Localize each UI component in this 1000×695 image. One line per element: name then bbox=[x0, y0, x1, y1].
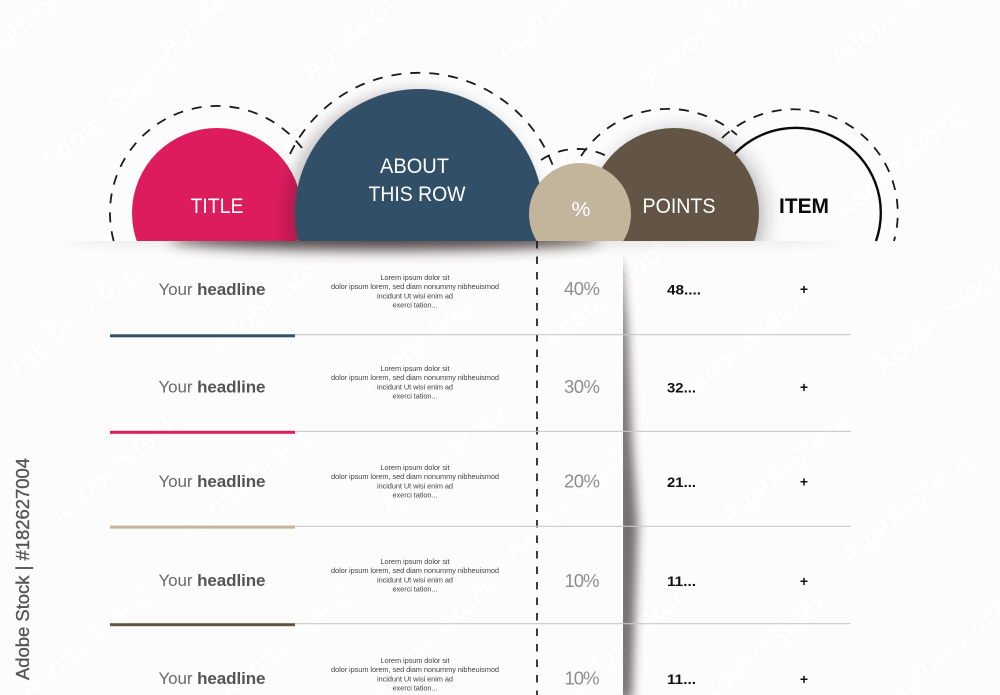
watermarks: Adobe Stock bbox=[174, 420, 315, 546]
label: item: ITEM bbox=[779, 195, 829, 218]
dashed arc: percent bbox=[541, 149, 612, 160]
watermarks: Adobe Stock bbox=[829, 100, 970, 226]
row 3 bbox=[158, 463, 808, 500]
watermarks: Adobe Stock bbox=[669, 285, 810, 411]
semicircle: percent bbox=[529, 163, 631, 241]
description 2: Lorem ipsum dolor sit bbox=[380, 364, 450, 373]
description 2: incidunt Ut wisi enim ad bbox=[377, 382, 453, 391]
description 5 bbox=[331, 656, 499, 693]
points 5: 11... bbox=[667, 672, 696, 687]
description 5: incidunt Ut wisi enim ad bbox=[377, 674, 453, 683]
row 4 bbox=[158, 557, 808, 594]
points 3: 21... bbox=[667, 475, 696, 490]
row dividers bbox=[110, 334, 851, 626]
row 1 bbox=[158, 273, 808, 310]
description 5: Lorem ipsum dolor sit bbox=[380, 656, 450, 665]
semicircle: about this row bbox=[280, 83, 542, 241]
description 3: incidunt Ut wisi enim ad bbox=[377, 481, 453, 490]
description 3: Lorem ipsum dolor sit bbox=[380, 463, 450, 472]
description 2 bbox=[331, 364, 499, 401]
percent 5: 10% bbox=[564, 668, 600, 688]
vertical dashed line bbox=[536, 241, 538, 695]
watermarks: Adobe Stock bbox=[2, 255, 143, 381]
description 1: exerci tation... bbox=[392, 301, 438, 310]
description 3: exerci tation... bbox=[392, 491, 438, 500]
points 4: 11... bbox=[667, 574, 696, 589]
percent 1: 40% bbox=[564, 278, 600, 299]
headline 5: Your headline bbox=[158, 669, 266, 688]
watermarks: Adobe Stock bbox=[564, 570, 705, 695]
row 5 bbox=[158, 656, 808, 693]
watermarks: Adobe Stock bbox=[536, 230, 677, 356]
semicircle: title bbox=[132, 128, 298, 241]
description 3 bbox=[331, 463, 499, 500]
description 5: dolor ipsum lorem, sed diam nonummy nibheuismod bbox=[331, 665, 499, 674]
description 4: dolor ipsum lorem, sed diam nonummy nibheuismod bbox=[331, 566, 499, 575]
description 3: dolor ipsum lorem, sed diam nonummy nibheuismod bbox=[331, 472, 499, 481]
description 1: Lorem ipsum dolor sit bbox=[380, 273, 450, 282]
description 1: incidunt Ut wisi enim ad bbox=[377, 291, 453, 300]
watermarks: Adobe Stock bbox=[374, 395, 515, 521]
description 2: exerci tation... bbox=[392, 392, 438, 401]
description 1 bbox=[331, 273, 499, 310]
shadow under header bbox=[89, 241, 811, 262]
description 4: exerci tation... bbox=[392, 585, 438, 594]
percent 2: 30% bbox=[564, 376, 600, 397]
label: about this row bbox=[368, 158, 466, 201]
percent 4: 10% bbox=[564, 570, 600, 591]
stock credit: Adobe Stock | #182627004 bbox=[13, 458, 33, 680]
watermarks: Adobe Stock bbox=[204, 235, 345, 361]
semicircle: points bbox=[598, 120, 776, 241]
watermarks: Adobe Stock bbox=[364, 570, 505, 695]
label: points: POINTS bbox=[642, 195, 716, 218]
row 2 bbox=[158, 364, 808, 401]
panel: dashed and outline arcs bbox=[110, 73, 898, 241]
watermarks: Adobe Stock bbox=[34, 52, 175, 178]
description 4 bbox=[331, 557, 499, 594]
label: percent: % bbox=[572, 199, 591, 221]
description 4: Lorem ipsum dolor sit bbox=[380, 557, 450, 566]
column shadow bbox=[616, 255, 638, 695]
watermarks: Adobe Stock bbox=[44, 405, 185, 531]
points 2: 32... bbox=[667, 380, 696, 396]
description 1: dolor ipsum lorem, sed diam nonummy nibheuismod bbox=[331, 282, 499, 291]
label: about this row: ABOUT bbox=[380, 155, 449, 178]
item 5: + bbox=[800, 671, 808, 687]
description 4: incidunt Ut wisi enim ad bbox=[377, 575, 453, 584]
dashed arc: about this row bbox=[290, 73, 556, 175]
description 5: exerci tation... bbox=[392, 684, 438, 693]
watermarks: Adobe Stock bbox=[834, 445, 975, 571]
headline 4: Your headline bbox=[158, 571, 266, 590]
headline 2: Your headline bbox=[158, 378, 266, 396]
dashed arc: points bbox=[581, 109, 737, 156]
description 2: dolor ipsum lorem, sed diam nonummy nibheuismod bbox=[331, 373, 499, 382]
headline 1: Your headline bbox=[158, 280, 266, 299]
dashed arc: title bbox=[110, 106, 302, 241]
label: about this row: THIS ROW bbox=[368, 183, 466, 206]
headline 3: Your headline bbox=[158, 472, 266, 491]
dashed arc: item bbox=[722, 109, 898, 241]
item 4: + bbox=[800, 573, 808, 589]
watermarks: Adobe Stock bbox=[714, 405, 855, 531]
watermarks: Adobe Stock bbox=[499, 440, 640, 566]
item outline arc bbox=[730, 128, 881, 241]
label: title: TITLE bbox=[190, 195, 244, 218]
item 1: + bbox=[800, 281, 808, 297]
points 1: 48.... bbox=[667, 282, 701, 298]
watermarks: Adobe Stock bbox=[354, 275, 495, 401]
item 3: + bbox=[800, 474, 808, 490]
item 2: + bbox=[800, 379, 808, 395]
percent 3: 20% bbox=[564, 470, 600, 492]
